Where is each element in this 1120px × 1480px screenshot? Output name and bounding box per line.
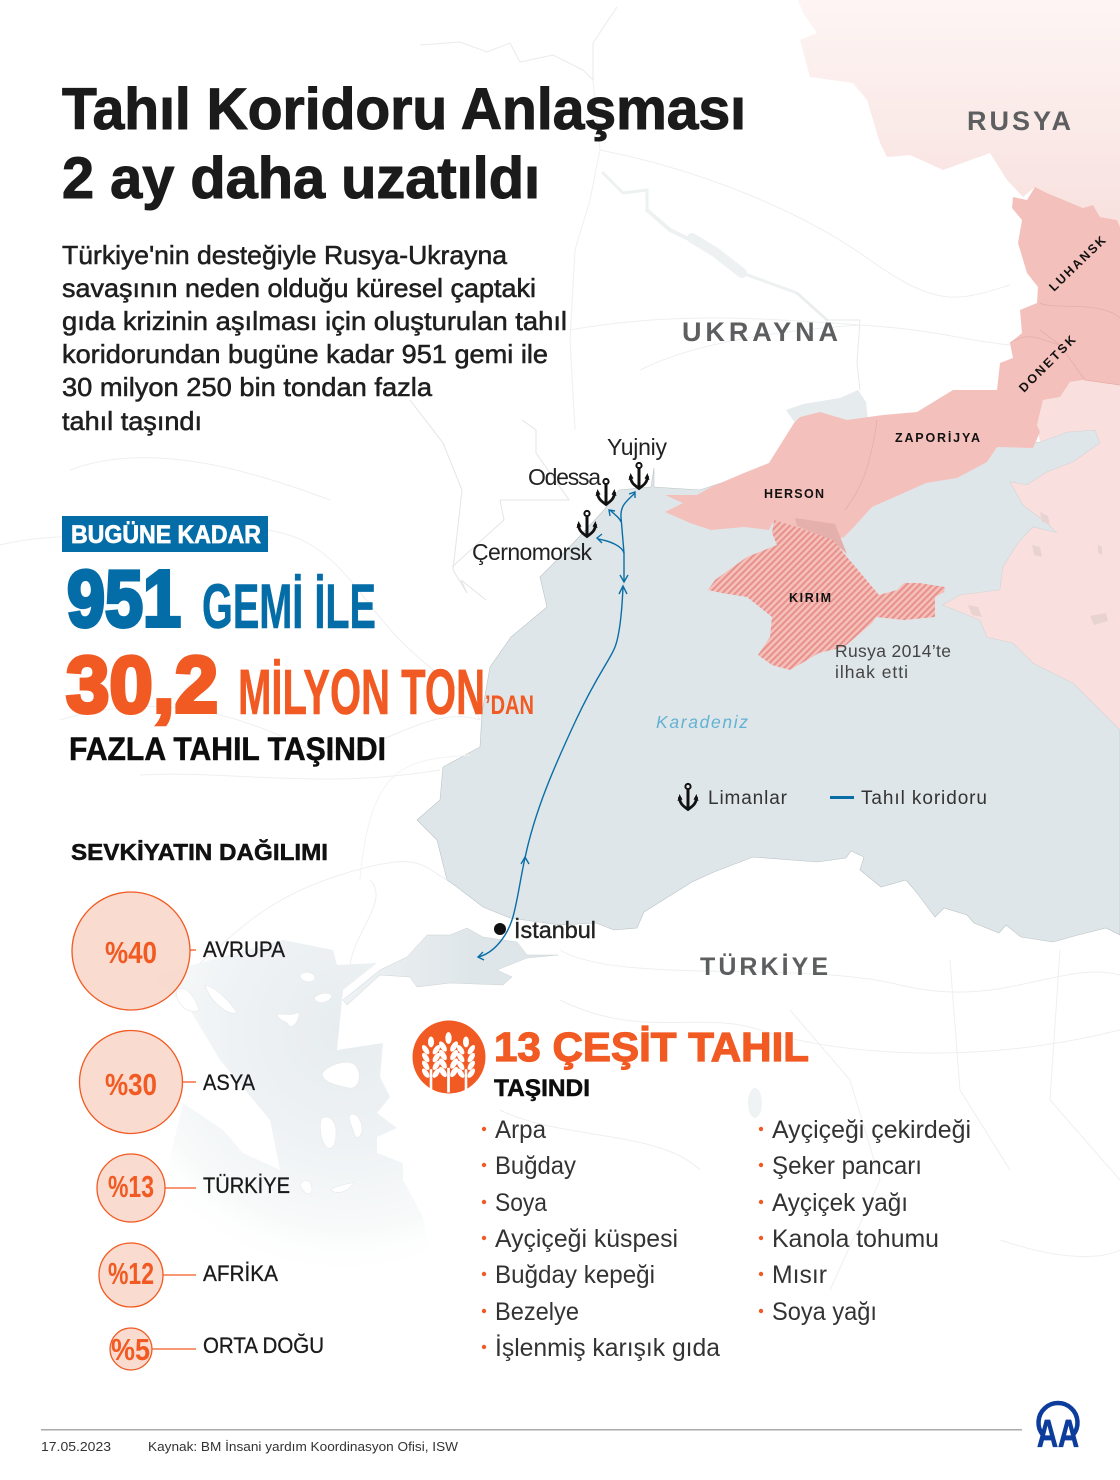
left sea sliver fade <box>0 1365 1120 1480</box>
port: Cernomorsk <box>472 511 598 565</box>
region labels: HERSON <box>764 487 824 501</box>
region labels: ZAPORİJYA <box>895 430 980 445</box>
distribution: Afrika <box>99 1243 278 1307</box>
shipment heading: SEVKİYATIN DAĞILIMI <box>71 838 328 865</box>
occupied regions Kherson Zaporizhzhia Donetsk Luhansk <box>665 187 1120 540</box>
annexation note <box>835 641 951 682</box>
port: Odessa <box>528 464 616 504</box>
logo: AA: AA <box>1037 1413 1079 1456</box>
annexation note: ilhak etti <box>835 662 908 682</box>
distribution: Turkiye: TÜRKİYE <box>203 1173 290 1198</box>
intro text: koridorundan bugüne kadar 951 gemi ile <box>62 339 548 369</box>
grain list left: Arpa <box>495 1116 546 1144</box>
grain list left: Bezelye <box>495 1298 579 1326</box>
region labels: KIRIM <box>789 591 831 605</box>
intro text: gıda krizinin aşılması için oluşturulan tahıl <box>62 306 567 336</box>
annexation note: Rusya 2014’te <box>835 641 951 661</box>
country labels: RUSYA <box>967 106 1071 136</box>
distribution: Orta Dogu <box>110 1328 324 1370</box>
grain list right: Mısır <box>772 1261 827 1289</box>
region labels <box>764 233 1109 605</box>
port: Yujniy <box>607 434 668 488</box>
Kakhovka reservoir <box>786 390 868 430</box>
distribution: Orta Dogu: ORTA DOĞU <box>203 1333 324 1358</box>
country labels <box>682 106 1071 981</box>
Russia territory <box>798 0 1120 227</box>
footer: Kaynak: BM İnsani yardım Koordinasyon Ofisi, ISW <box>148 1440 458 1454</box>
stat: 951 ships: GEMİ İLE <box>202 572 376 642</box>
Black Sea <box>417 430 1120 942</box>
grain heading <box>494 1024 809 1102</box>
stat caption: FAZLA TAHIL TAŞINDI <box>69 731 386 767</box>
distribution: Asya: ASYA <box>203 1070 255 1095</box>
intro text: 30 milyon 250 bin tondan fazla <box>62 372 433 402</box>
title <box>62 77 746 211</box>
port: Cernomorsk: Çernomorsk <box>472 539 592 565</box>
grain list right: Soya yağı <box>772 1298 877 1326</box>
grain list right: Kanola tohumu <box>772 1225 939 1253</box>
distribution: Avrupa: AVRUPA <box>203 937 285 962</box>
grain list right <box>759 1116 971 1326</box>
title: Tahıl Koridoru Anlaşması <box>62 77 746 142</box>
footer <box>41 1429 1022 1454</box>
Lake Tuz <box>748 1088 762 1118</box>
intro text: tahıl taşındı <box>62 406 202 436</box>
map legend <box>678 784 987 810</box>
Dnieper river <box>603 173 827 320</box>
grain list left: Soya <box>495 1189 547 1217</box>
stat: 30.2 million tons <box>66 640 534 729</box>
grain list left <box>482 1116 720 1362</box>
icon: wheat <box>412 1020 486 1094</box>
footer: 17.05.2023 <box>41 1440 111 1454</box>
distribution: Turkiye: %13 <box>108 1169 154 1204</box>
grain list right: Ayçiçeği çekirdeği <box>772 1116 971 1144</box>
distribution: Afrika: AFRİKA <box>203 1261 278 1286</box>
distribution: Asya <box>80 1030 255 1134</box>
stat: 951 ships <box>67 554 376 643</box>
region labels: DONETSK <box>1016 333 1078 395</box>
stat: 30.2 million tons: 30,2 <box>66 640 218 729</box>
stat: 951 ships: 951 <box>67 554 181 643</box>
grain list right: Ayçiçek yağı <box>772 1189 908 1217</box>
region labels: LUHANSK <box>1046 233 1109 294</box>
stat: 30.2 million tons: MİLYON TON <box>238 656 485 728</box>
Crimea hatched <box>708 520 945 670</box>
intro text <box>62 240 567 436</box>
grain heading: TAŞINDI <box>494 1075 590 1102</box>
country labels: TÜRKİYE <box>700 952 828 981</box>
grain heading: 13 ÇEŞİT TAHIL <box>494 1024 809 1070</box>
Marmara sea <box>343 928 558 1005</box>
distribution: Asya: %30 <box>105 1067 157 1102</box>
sea label: Karadeniz <box>656 712 748 732</box>
port: Yujniy: Yujniy <box>607 434 668 460</box>
grain corridor route <box>478 492 635 960</box>
stat: 30.2 million tons: ’DAN <box>485 690 534 720</box>
port: Odessa: Odessa <box>528 464 601 490</box>
map legend: Limanlar <box>708 788 788 809</box>
country labels: UKRAYNA <box>682 317 838 347</box>
intro text: Türkiye'nin desteğiyle Rusya-Ukrayna <box>62 240 508 270</box>
Krasnodar territory <box>943 380 1120 730</box>
region borders <box>845 303 1120 510</box>
grain list left: İşlenmiş karışık gıda <box>495 1333 720 1362</box>
badge: bugune kadar: BUGÜNE KADAR <box>71 520 261 549</box>
distribution: Turkiye <box>97 1154 290 1222</box>
Aegean sea shading <box>130 940 440 1300</box>
distribution: Orta Dogu: %5 <box>111 1332 150 1367</box>
intro text: savaşının neden olduğu küresel çaptaki <box>62 273 536 303</box>
logo: AA <box>1037 1403 1079 1456</box>
Istanbul marker: İstanbul <box>514 917 596 943</box>
title: 2 ay daha uzatıldı <box>62 146 540 211</box>
distribution: Avrupa <box>72 892 285 1010</box>
distribution: Afrika: %12 <box>108 1256 154 1291</box>
Perekop blotch <box>795 518 847 554</box>
Aegean islands and peninsulas <box>176 972 362 1194</box>
distribution: Avrupa: %40 <box>105 935 157 970</box>
Krasnodar city blotches <box>968 512 1108 625</box>
grain list right: Şeker pancarı <box>772 1152 922 1180</box>
grain list left: Buğday <box>495 1152 576 1180</box>
map legend: Tahıl koridoru <box>861 788 987 809</box>
grain list left: Buğday kepeği <box>495 1261 655 1289</box>
grain list left: Ayçiçeği küspesi <box>495 1225 678 1253</box>
